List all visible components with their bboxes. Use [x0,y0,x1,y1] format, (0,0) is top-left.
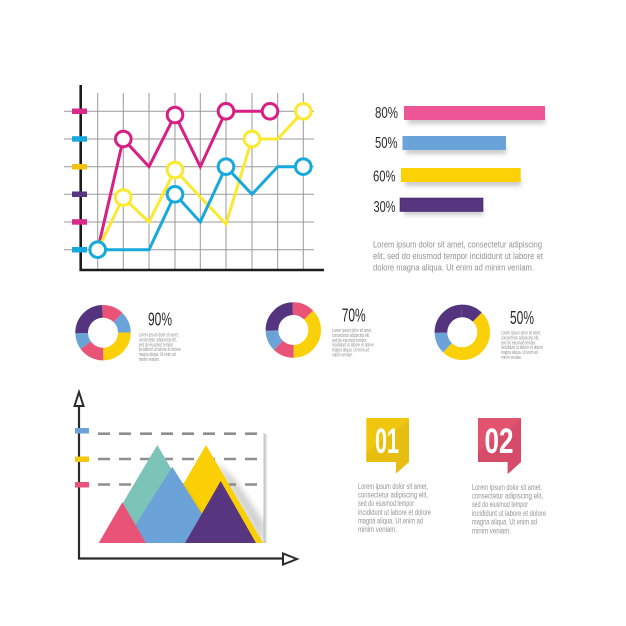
badge fold [478,420,521,474]
triangle shadows [214,460,264,543]
line chart [64,85,324,270]
text 01: minim veniam. [358,525,397,534]
triangle area chart [74,392,297,564]
bar chart description [373,240,543,274]
bar 30%: 30% [374,199,396,216]
donut 70% [272,306,374,358]
text 02: Lorem ipsum dolor sit amet, [472,483,542,492]
text 70%: sed do eiusmod tempor [332,338,367,344]
pink triangle [99,502,146,543]
text 50%: magna aliqua. Ut enim ad [501,350,538,356]
text 02: magna aliqua. Ut enim ad [472,518,537,526]
gridlines with shadow [98,433,268,543]
text 02: sed do eiusmod tempor [472,500,528,509]
badge fold [366,420,409,474]
donut 90% [82,310,181,363]
text 70% [332,328,374,358]
text 90% [139,332,181,363]
axis tick markers [75,428,89,488]
text 50%: consectetur adipiscing elit, [501,335,539,341]
purple triangle [185,481,256,543]
text 02: consectetur adipiscing elit, [472,492,543,500]
number 02: 02 [484,422,514,461]
bar 50%: 50% [375,135,398,152]
bar 80%: 80% [375,105,398,122]
text 02 [472,483,546,536]
badge 02 [478,418,521,474]
text 90%: consectetur adipiscing elit, [139,337,177,343]
horizontal bar chart [373,105,545,216]
text 90%: Lorem ipsum dolor sit amet, [139,332,179,338]
chart axes [81,85,324,270]
yellow data series [98,104,311,250]
badge 01 [366,418,409,474]
number 01: 01 [375,422,399,461]
text 01: sed do eiusmod tempor [358,499,414,508]
text 70%: incididunt ut labore et dolore [332,343,374,349]
text 50% [501,330,543,361]
bar 30% [374,198,483,216]
text 50%: minim veniam. [501,355,522,361]
text 50%: sed do eiusmod tempor [501,340,536,346]
bar shadows [404,117,545,215]
text 70%: Lorem ipsum dolor sit amet, [332,328,372,334]
text 90%: incididunt ut labore et dolore [139,347,181,353]
text 01: Lorem ipsum dolor sit amet, [358,482,428,491]
text 70%: minim veniam. [332,352,353,358]
pink data series [98,104,278,250]
yellow triangle [149,445,263,543]
bar chart description: Lorem ipsum dolor sit amet, consectetur adipiscing [373,240,542,250]
text 01: magna aliqua. Ut enim ad [358,516,423,526]
text 02: minim veniam. [472,526,511,536]
label 70%: 70% [342,306,366,326]
text 90%: sed do eiusmod tempor [139,342,174,348]
axes with arrows [74,392,297,564]
bar 60%: 60% [373,168,396,186]
bar 80% [375,105,545,122]
text 50%: incididunt ut labore et dolore [501,345,543,351]
shading on yellow triangle [176,486,205,535]
text 90%: magna aliqua. Ut enim ad [139,352,176,358]
text 02: incididunt ut labore et dolore [472,509,546,518]
text 70%: magna aliqua. Ut enim ad [332,348,369,354]
callout 02 [472,418,546,536]
bar chart description: elit, sed do eiusmod tempor incididunt ut labore et [373,251,543,262]
bar 50% [375,135,506,152]
text 90%: minim veniam. [139,357,160,363]
donut 50% [441,308,543,361]
label 90%: 90% [148,310,172,330]
teal triangle [99,445,215,543]
text 70%: consectetur adipiscing elit, [332,333,370,339]
bar 60% [373,168,521,186]
label 50%: 50% [510,308,534,328]
text 01 [358,482,431,534]
blue triangle [124,467,220,543]
text 01: consectetur adipiscing elit, [358,490,428,500]
axis tick markers [72,108,87,252]
text 50%: Lorem ipsum dolor sit amet, [501,330,541,336]
text 01: incididunt ut labore et dolore [358,508,431,517]
callout 01 [358,418,431,534]
blue data series [90,159,311,258]
bar chart description: dolore magna aliqua. Ut enim ad minim veniam. [373,262,534,274]
